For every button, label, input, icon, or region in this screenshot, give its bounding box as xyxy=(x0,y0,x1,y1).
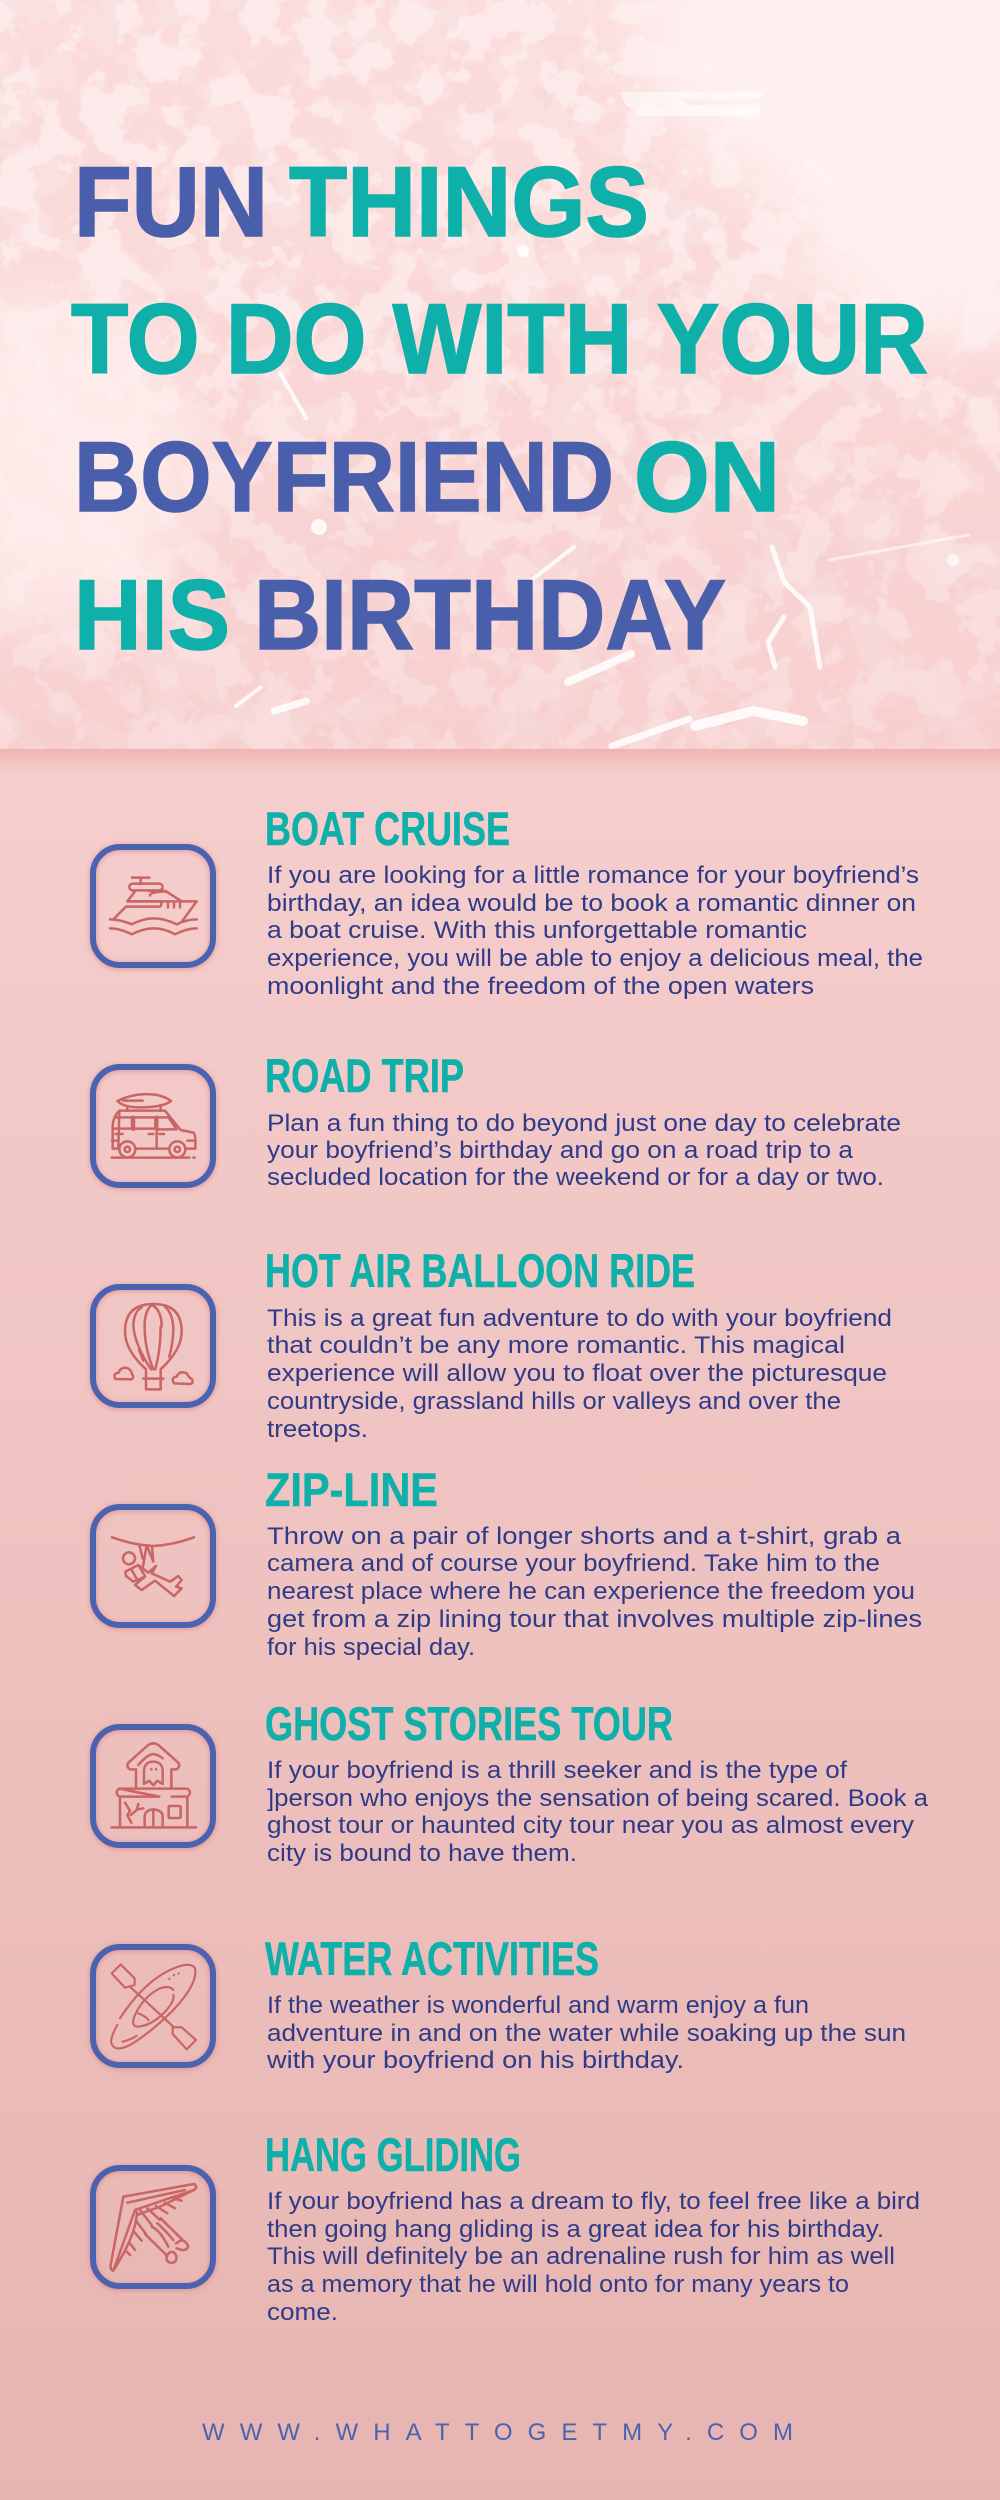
panel: hang gliding xyxy=(93,2128,920,2326)
text: hot air balloon description: This is a great fun adventure to do with your boyfriend xyxy=(267,1305,892,1332)
text: hang gliding description: as a memory that he will hold onto for many years to xyxy=(267,2271,849,2298)
text: zip-line description: for his special day. xyxy=(267,1634,475,1661)
panel: activities list background xyxy=(0,749,1000,2500)
heading: water activities: WATER ACTIVITIES xyxy=(265,1932,599,1985)
panel: boat cruise xyxy=(93,802,923,1000)
text: water activities description: adventure in and on the water while soaking up the sun xyxy=(267,2020,906,2047)
icon: hot air balloon xyxy=(93,1287,213,1405)
footer website: WWW.WHATTOGETMY.COM xyxy=(202,2419,793,2446)
text: water activities description: If the weather is wonderful and warm enjoy a fun xyxy=(267,1992,809,2019)
title: THINGS xyxy=(289,146,649,257)
heading: zip-line: ZIP-LINE xyxy=(265,1463,438,1516)
text: hot air balloon description xyxy=(267,1305,892,1443)
text: zip-line description: camera and of course your boyfriend. Take him to the xyxy=(267,1550,880,1577)
text: ghost stories description: ghost tour or haunted city tour near you as almost every xyxy=(267,1812,915,1839)
text: boat cruise description: birthday, an idea would be to book a romantic dinner on xyxy=(267,890,916,917)
title: ON xyxy=(634,421,780,532)
text: zip-line description: nearest place where he can experience the freedom you xyxy=(267,1578,915,1605)
panel: hot air balloon ride xyxy=(93,1244,892,1443)
heading: hang gliding: HANG GLIDING xyxy=(265,2128,521,2181)
text: road trip description: your boyfriend’s birthday and go on a road trip to a xyxy=(267,1137,853,1164)
icon: haunted house xyxy=(93,1727,213,1845)
title: FUN xyxy=(74,146,268,257)
title: BOYFRIEND xyxy=(74,421,614,532)
text: water activities description: with your boyfriend on his birthday. xyxy=(266,2047,684,2074)
text: hot air balloon description: experience will allow you to float over the picturesque xyxy=(267,1360,887,1387)
text: water activities description xyxy=(266,1992,906,2074)
icon: kayak and paddle xyxy=(93,1947,213,2065)
text: boat cruise description xyxy=(267,862,923,1000)
text: hang gliding description: This will definitely be an adrenaline rush for him as well xyxy=(267,2243,895,2270)
text: zip-line description xyxy=(267,1523,922,1661)
text: hang gliding description: come. xyxy=(267,2299,338,2326)
icon: boat xyxy=(93,847,213,965)
title: TO DO WITH YOUR xyxy=(71,283,928,394)
icon: car with surfboard xyxy=(93,1067,213,1185)
icon: zip-line rider xyxy=(93,1507,213,1625)
text: hang gliding description xyxy=(267,2188,920,2326)
panel: zip-line xyxy=(93,1463,922,1661)
panel: water activities xyxy=(93,1932,906,2074)
heading: hot air balloon ride: HOT AIR BALLOON RIDE xyxy=(265,1244,695,1297)
text: ghost stories description xyxy=(267,1757,928,1867)
text: ghost stories description: city is bound to have them. xyxy=(267,1840,577,1867)
heading: boat cruise: BOAT CRUISE xyxy=(265,802,510,855)
text: hang gliding description: If your boyfriend has a dream to fly, to feel free like a bird xyxy=(267,2188,920,2215)
panel: ghost stories tour xyxy=(93,1697,928,1867)
panel: title hero with pink marble texture xyxy=(0,0,1000,749)
title xyxy=(71,146,928,670)
text: boat cruise description: experience, you will be able to enjoy a delicious meal, the xyxy=(267,945,923,972)
title: BIRTHDAY xyxy=(254,559,726,670)
icon: hang glider xyxy=(93,2168,213,2286)
heading: road trip: ROAD TRIP xyxy=(265,1049,464,1102)
text: ghost stories description: ]person who enjoys the sensation of being scared. Book a xyxy=(267,1785,928,1812)
text: boat cruise description: moonlight and the freedom of the open waters xyxy=(267,973,814,1000)
text: zip-line description: Throw on a pair of longer shorts and a t-shirt, grab a xyxy=(267,1523,901,1550)
text: boat cruise description: a boat cruise. With this unforgettable romantic xyxy=(267,917,807,944)
text: zip-line description: get from a zip lining tour that involves multiple zip-lines xyxy=(267,1606,922,1633)
text: ghost stories description: If your boyfriend is a thrill seeker and is the type of xyxy=(267,1757,847,1784)
text: hot air balloon description: countryside, grassland hills or valleys and over the xyxy=(267,1388,841,1415)
text: road trip description xyxy=(267,1110,901,1191)
text: hot air balloon description: treetops. xyxy=(267,1416,368,1443)
text: hang gliding description: then going hang gliding is a great idea for his birthday. xyxy=(267,2216,884,2243)
text: road trip description: secluded location for the weekend or for a day or two. xyxy=(267,1164,884,1191)
text: boat cruise description: If you are looking for a little romance for your boyfriend’s xyxy=(267,862,919,889)
panel: road trip xyxy=(93,1049,901,1191)
text: road trip description: Plan a fun thing to do beyond just one day to celebrate xyxy=(267,1110,901,1137)
text: hot air balloon description: that couldn’t be any more romantic. This magical xyxy=(267,1332,845,1359)
title: HIS xyxy=(74,559,230,670)
heading: ghost stories tour: GHOST STORIES TOUR xyxy=(265,1697,673,1750)
